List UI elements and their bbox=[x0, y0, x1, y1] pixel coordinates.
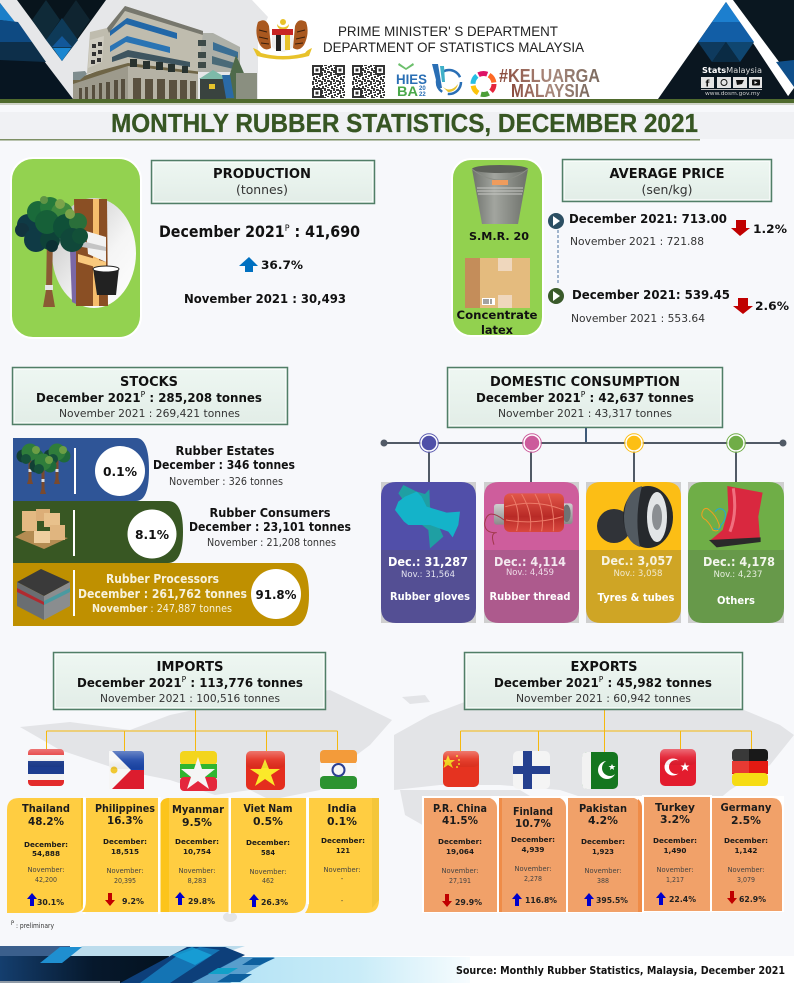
heading: exports: : 45,982 tonnes bbox=[603, 675, 712, 690]
heading: domestic consumption: P bbox=[581, 390, 586, 399]
card: Pakistan: Pakistan bbox=[579, 802, 627, 815]
header right triangles bbox=[658, 0, 794, 99]
heading: domestic consumption bbox=[448, 368, 722, 428]
price concentrate latex: December 2021: 539.45 bbox=[572, 288, 730, 302]
heading: imports: December 2021 bbox=[77, 675, 188, 690]
bar: rubber processors: 91.8% bbox=[256, 588, 296, 602]
card: tyres and tubes: Dec.: 3,057 bbox=[601, 553, 673, 568]
card: Viet Nam bbox=[228, 797, 306, 914]
card: tyres and tubes: Nov.: 3,058 bbox=[614, 569, 662, 579]
heading: domestic consumption: November 2021 : 43,317 tonnes bbox=[498, 407, 672, 420]
card: Viet Nam: November: bbox=[250, 867, 286, 876]
card: Germany: 62.9% bbox=[739, 895, 766, 904]
footnote: : preliminary bbox=[14, 922, 54, 930]
panel: domestic consumption bbox=[380, 368, 786, 623]
heading: imports: : 113,776 tonnes bbox=[186, 675, 303, 690]
card: Germany: November: bbox=[728, 865, 764, 874]
card: P.R. China: P.R. China bbox=[433, 802, 487, 815]
logo: HIES BA 2022: 22 bbox=[419, 92, 426, 98]
label: rubber consumers bbox=[189, 505, 351, 549]
card: Thailand: Thailand bbox=[22, 802, 70, 815]
card: Thailand: 30.1% bbox=[37, 898, 64, 907]
card: Viet Nam: Viet Nam bbox=[244, 802, 292, 815]
card: Thailand bbox=[7, 798, 85, 913]
card: rubber gloves: Rubber gloves bbox=[390, 591, 470, 603]
card: Philippines: 16.3% bbox=[107, 814, 143, 827]
card: P.R. China: 29.9% bbox=[455, 898, 482, 907]
flag: Finland bbox=[513, 751, 550, 789]
card: Pakistan: 395.5% bbox=[596, 896, 628, 905]
logo: HIES BA 2022 bbox=[396, 63, 427, 99]
card: India: 0.1% bbox=[327, 815, 357, 828]
heading: stocks bbox=[12, 368, 288, 424]
flag: Pakistan bbox=[582, 752, 618, 789]
title band bbox=[0, 108, 794, 140]
card: India: November: bbox=[324, 865, 360, 874]
price S.M.R. 20: December 2021: 713.00 bbox=[569, 212, 727, 226]
card: Pakistan bbox=[566, 796, 644, 913]
panel: production bbox=[11, 158, 374, 338]
card: Philippines: 9.2% bbox=[122, 897, 144, 906]
card: others bbox=[688, 482, 784, 623]
card: Myanmar: November: bbox=[178, 866, 216, 875]
card: Viet Nam: December: bbox=[246, 838, 290, 847]
price concentrate latex: 2.6% bbox=[755, 299, 789, 313]
card: Germany: 3,079 bbox=[737, 875, 755, 884]
card: Philippines: Philippines bbox=[95, 802, 155, 815]
heading: imports bbox=[54, 652, 326, 710]
header green rule bbox=[0, 99, 794, 105]
panel: average price bbox=[452, 159, 789, 337]
connector lines bbox=[46, 710, 338, 752]
heading: average price: (sen/kg) bbox=[642, 182, 692, 197]
card: others: Nov.: 4,237 bbox=[714, 570, 762, 580]
label: rubber estates: November : 326 tonnes bbox=[169, 476, 283, 488]
price concentrate latex: November 2021 : 553.64 bbox=[571, 312, 705, 325]
card: Viet Nam: 462 bbox=[262, 876, 274, 885]
logo: coat of arms bbox=[253, 19, 312, 60]
icon: QR code 2 bbox=[352, 65, 385, 98]
social media block: Stats Malaysia bbox=[702, 66, 762, 75]
card: Pakistan: December: bbox=[581, 837, 625, 846]
card: Finland bbox=[497, 796, 569, 913]
flag: China bbox=[443, 751, 479, 787]
heading: exports bbox=[464, 652, 742, 710]
world map background bbox=[20, 690, 794, 922]
bar: rubber consumers: 8.1% bbox=[135, 528, 169, 542]
flag: Turkey bbox=[660, 749, 696, 786]
building photo bbox=[73, 6, 257, 99]
heading: production: (tonnes) bbox=[236, 182, 288, 197]
card: rubber gloves: Nov.: 31,564 bbox=[401, 570, 455, 580]
card: Philippines: November: bbox=[106, 866, 144, 875]
card: Thailand: 42,200 bbox=[35, 875, 57, 884]
card: rubber thread: Rubber thread bbox=[490, 591, 570, 603]
card: India bbox=[305, 797, 379, 913]
card: Turkey: 22.4% bbox=[669, 895, 696, 904]
label: rubber consumers: December : 23,101 tonnes bbox=[189, 519, 351, 534]
card: P.R. China: November: bbox=[442, 866, 478, 875]
card: rubber thread: Nov.: 4,459 bbox=[506, 568, 554, 578]
card: Viet Nam: 0.5% bbox=[253, 815, 283, 828]
card: Philippines: December: bbox=[103, 837, 147, 846]
label: rubber processors: December : 261,762 tonnes bbox=[78, 586, 247, 601]
flag: India bbox=[320, 750, 357, 789]
marker: S.M.R. 20 bbox=[548, 213, 564, 229]
heading: exports: P bbox=[599, 675, 604, 684]
price S.M.R. 20: November 2021 : 721.88 bbox=[570, 235, 704, 248]
label: rubber processors: Rubber Processors bbox=[106, 572, 219, 586]
card: Viet Nam: 26.3% bbox=[261, 898, 288, 907]
card: rubber thread bbox=[484, 482, 579, 623]
icon: gloves bbox=[395, 485, 460, 548]
logo: HIES BA 2022: HIES bbox=[396, 71, 427, 87]
card: Pakistan: 4.2% bbox=[588, 814, 618, 827]
social media block: f bbox=[706, 80, 710, 90]
December production figure: : 41,690 bbox=[290, 222, 360, 241]
card: P.R. China: December: bbox=[438, 837, 482, 846]
card: Finland: 10.7% bbox=[515, 817, 551, 830]
header banner bbox=[0, 0, 794, 105]
header left triangles bbox=[0, 0, 268, 99]
panel: exports bbox=[422, 652, 784, 913]
heading: imports: P bbox=[182, 675, 186, 684]
logo: Keluarga Malaysia: MALAYSIA bbox=[511, 81, 590, 101]
card: tyres and tubes bbox=[586, 482, 681, 623]
card: rubber thread: Dec.: 4,114 bbox=[494, 554, 566, 569]
logo: Keluarga Malaysia bbox=[499, 66, 600, 101]
heading: stocks: STOCKS bbox=[120, 375, 178, 390]
card: Finland: 2,278 bbox=[524, 874, 542, 883]
icon: up arrow bbox=[239, 257, 258, 272]
icon card: rubber types: Concentrate bbox=[456, 308, 538, 322]
card: Turkey: Turkey bbox=[655, 801, 695, 814]
card: Turkey bbox=[642, 795, 712, 912]
social media block: www.dosm.gov.my bbox=[705, 91, 760, 97]
panel: imports bbox=[7, 652, 379, 914]
connector lines bbox=[460, 710, 752, 752]
heading: stocks: : 285,208 tonnes bbox=[145, 390, 262, 405]
flag: Myanmar bbox=[180, 751, 217, 791]
card: Myanmar bbox=[158, 797, 231, 914]
card: Germany: December: bbox=[724, 836, 768, 845]
footnote: P bbox=[11, 920, 14, 927]
icon: QR code 1 bbox=[312, 65, 345, 98]
card: P.R. China bbox=[422, 796, 497, 913]
heading: imports: November 2021 : 100,516 tonnes bbox=[100, 692, 280, 705]
card: P.R. China: 27,191 bbox=[449, 876, 471, 885]
bar: rubber consumers bbox=[13, 501, 183, 563]
label: rubber consumers: November : 21,208 tonnes bbox=[207, 537, 336, 549]
card: Philippines: 20,395 bbox=[114, 876, 136, 885]
label: rubber processors: November : 247,887 tonnes bbox=[92, 603, 232, 615]
card: India: India bbox=[328, 802, 356, 815]
icon card: rubber types bbox=[452, 159, 543, 337]
card: Myanmar: 29.8% bbox=[188, 897, 215, 906]
flag: Thailand bbox=[28, 749, 64, 786]
icon card: rubber types: S.M.R. 20 bbox=[469, 230, 529, 243]
December production figure: December 2021 bbox=[159, 222, 300, 241]
card: Turkey: November: bbox=[656, 865, 694, 874]
card: Philippines: 18,515 bbox=[111, 847, 139, 856]
card: Finland: 4,939 bbox=[522, 845, 544, 854]
label: rubber estates: December : 346 tonnes bbox=[153, 457, 295, 472]
logo: census bbox=[432, 64, 461, 94]
card: Germany: Germany bbox=[720, 801, 772, 814]
heading: stocks: December 2021 bbox=[36, 390, 146, 405]
social media block bbox=[701, 66, 762, 97]
card: Germany: 1,142 bbox=[734, 846, 758, 855]
card: Myanmar: December: bbox=[175, 837, 219, 846]
department name: PRIME MINISTER' S DEPARTMENT bbox=[338, 23, 558, 39]
heading: imports: IMPORTS bbox=[156, 660, 224, 675]
connector tree bbox=[380, 428, 786, 482]
card: India: - bbox=[341, 896, 344, 905]
icon card: rubber types: latex bbox=[481, 323, 514, 337]
logo: Keluarga Malaysia: #KELUARGA bbox=[499, 66, 600, 86]
card: rubber gloves bbox=[381, 482, 476, 623]
department name: DEPARTMENT OF STATISTICS MALAYSIA bbox=[323, 39, 585, 55]
bar: rubber processors bbox=[13, 563, 309, 626]
heading: production bbox=[152, 160, 374, 204]
card: Finland: Finland bbox=[513, 805, 553, 818]
icon card: rubber tapping bbox=[11, 158, 141, 338]
flag: Viet Nam bbox=[246, 751, 285, 790]
heading: exports: EXPORTS bbox=[570, 660, 638, 675]
label: rubber processors bbox=[78, 572, 247, 615]
card: Turkey: 1,490 bbox=[664, 846, 686, 855]
card: Finland: December: bbox=[511, 835, 555, 844]
label: rubber consumers: Rubber Consumers bbox=[210, 505, 330, 520]
card: others: Others bbox=[717, 595, 755, 607]
heading: domestic consumption: December 2021 bbox=[476, 390, 586, 405]
card: Finland: November: bbox=[514, 864, 552, 873]
heading: stocks: P bbox=[141, 390, 145, 399]
card: Germany bbox=[710, 796, 784, 912]
heading: exports: December 2021 bbox=[494, 675, 604, 690]
December production figure: P bbox=[285, 224, 290, 234]
logo: HIES BA 2022: 20 bbox=[419, 86, 426, 92]
card: Germany: 2.5% bbox=[731, 814, 761, 827]
heading: domestic consumption: : 42,637 tonnes bbox=[585, 390, 694, 405]
heading: average price: AVERAGE PRICE bbox=[610, 167, 724, 182]
heading: average price bbox=[562, 160, 772, 202]
card: India: - bbox=[341, 874, 344, 883]
footer band bbox=[0, 946, 794, 983]
label: rubber estates: Rubber Estates bbox=[176, 443, 274, 458]
card: Myanmar: 10,754 bbox=[183, 847, 211, 856]
price S.M.R. 20: 1.2% bbox=[753, 222, 787, 236]
logo: SDG wheel bbox=[473, 74, 494, 94]
production change: 36.7% bbox=[261, 258, 303, 272]
card: Pakistan: 388 bbox=[597, 876, 609, 885]
flag: Philippines bbox=[109, 751, 144, 789]
flag: Germany bbox=[732, 749, 768, 786]
icon: tyres bbox=[597, 486, 673, 548]
card: rubber gloves: Dec.: 31,287 bbox=[388, 554, 468, 569]
card: Myanmar: 8,283 bbox=[188, 876, 206, 885]
card: others: Dec.: 4,178 bbox=[703, 554, 775, 569]
card: Myanmar: Myanmar bbox=[172, 803, 225, 816]
card: Pakistan: 1,923 bbox=[592, 847, 614, 856]
price S.M.R. 20 bbox=[569, 212, 787, 248]
heading: domestic consumption: DOMESTIC CONSUMPTION bbox=[490, 375, 680, 390]
card: Thailand: November: bbox=[28, 865, 64, 874]
card: P.R. China: 41.5% bbox=[442, 814, 478, 827]
card: Turkey: December: bbox=[653, 836, 697, 845]
November production figure: November 2021 : 30,493 bbox=[184, 292, 346, 306]
title: MONTHLY RUBBER STATISTICS, DECEMBER 2021 bbox=[111, 108, 698, 138]
card: Thailand: 54,888 bbox=[32, 849, 60, 858]
card: Myanmar: 9.5% bbox=[182, 816, 212, 829]
card: Turkey: 3.2% bbox=[660, 813, 690, 826]
card: P.R. China: 19,064 bbox=[446, 847, 474, 856]
card: Turkey: 1,217 bbox=[666, 875, 684, 884]
card: Viet Nam: 584 bbox=[261, 848, 275, 857]
card: tyres and tubes: Tyres & tubes bbox=[598, 592, 674, 604]
card: Thailand: December: bbox=[24, 840, 68, 849]
bar: rubber estates: 0.1% bbox=[103, 465, 137, 479]
label: rubber estates bbox=[153, 443, 295, 488]
department name bbox=[323, 23, 585, 55]
panel: stocks bbox=[12, 368, 351, 626]
icon: thread spool bbox=[485, 493, 573, 545]
marker: concentrate latex bbox=[548, 288, 564, 304]
heading: exports: November 2021 : 60,942 tonnes bbox=[516, 692, 691, 705]
card: India: December: bbox=[321, 836, 365, 845]
bar: rubber estates bbox=[13, 438, 149, 501]
price concentrate latex bbox=[571, 288, 789, 325]
card: Philippines bbox=[82, 797, 158, 914]
heading: stocks: November 2021 : 269,421 tonnes bbox=[59, 407, 240, 420]
icon: boot and bands bbox=[702, 486, 763, 547]
timeline connector bbox=[557, 230, 559, 285]
card: Pakistan: November: bbox=[584, 866, 622, 875]
heading: production: PRODUCTION bbox=[213, 167, 311, 182]
card: India: 121 bbox=[336, 846, 350, 855]
card: Thailand: 48.2% bbox=[28, 815, 64, 828]
card: Finland: 116.8% bbox=[525, 896, 557, 905]
logo: HIES BA 2022: BA bbox=[397, 83, 418, 99]
